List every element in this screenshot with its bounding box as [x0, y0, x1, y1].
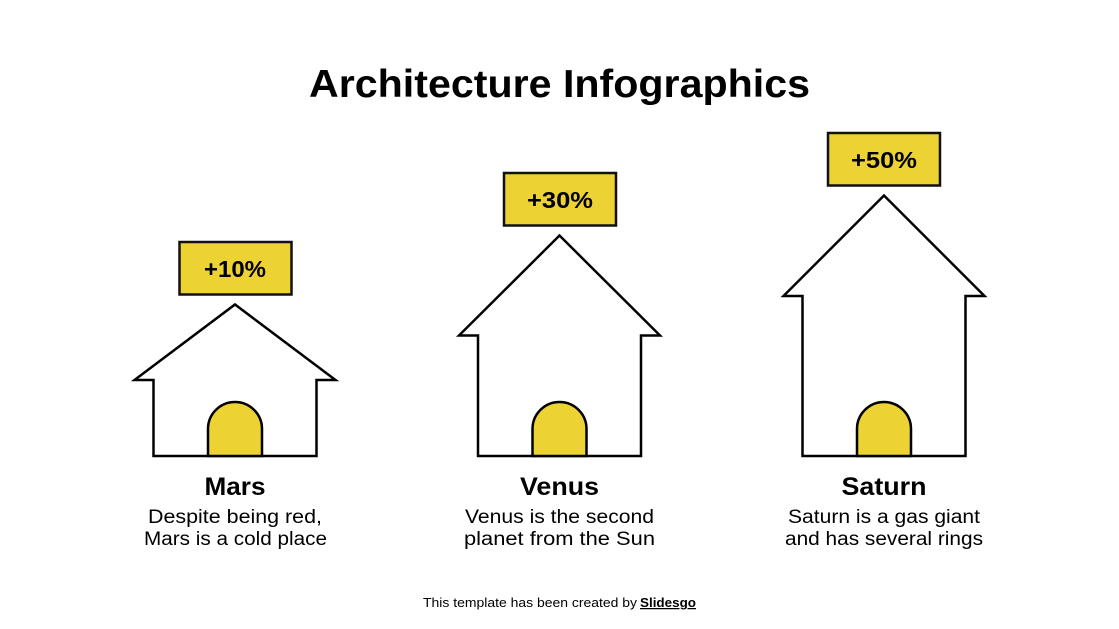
- panel: Mars: [134, 242, 336, 550]
- text: Mars description: Mars is a cold place: [144, 529, 327, 550]
- text: Venus description: [464, 507, 655, 550]
- panel: Saturn: [784, 133, 984, 550]
- panel: Venus: [459, 173, 660, 550]
- footer credit: Slidesgo: [640, 596, 696, 610]
- icon: house: [784, 196, 984, 456]
- text: Saturn description: Saturn is a gas giant: [788, 507, 981, 528]
- text: Mars description: [144, 507, 327, 550]
- title: Architecture Infographics: [309, 63, 810, 106]
- icon: house: [459, 236, 660, 456]
- badge: +30%: [504, 173, 616, 226]
- badge: +50%: [828, 133, 940, 186]
- text: Venus description: Venus is the second: [465, 507, 654, 528]
- badge: +50%: +50%: [851, 147, 917, 173]
- heading: Mars: Mars: [204, 473, 266, 501]
- icon: house: [134, 304, 336, 456]
- footer credit: This template has been created by: [423, 596, 638, 610]
- text: Mars description: Despite being red,: [148, 507, 322, 528]
- badge: +10%: +10%: [204, 256, 266, 282]
- badge: +10%: [180, 242, 292, 294]
- text: Venus description: planet from the Sun: [464, 529, 655, 550]
- heading: Saturn: Saturn: [842, 473, 926, 501]
- heading: Venus: Venus: [520, 473, 599, 501]
- text: Saturn description: and has several rings: [785, 529, 983, 550]
- text: Saturn description: [785, 507, 983, 550]
- badge: +30%: +30%: [527, 187, 593, 213]
